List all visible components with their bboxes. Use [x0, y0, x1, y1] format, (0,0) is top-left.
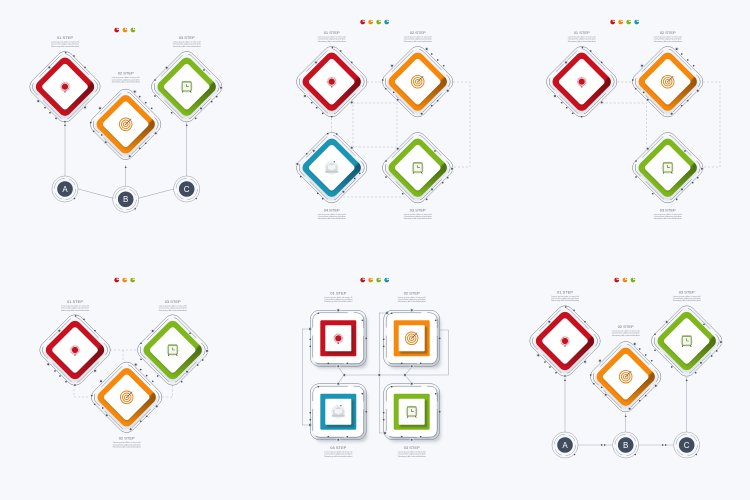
- label: step 1: Lorem ipsum dolor sit amet elit: [324, 296, 353, 299]
- connector lines: [64, 122, 188, 198]
- label: step 3: Lorem ipsum dolor sit amet elit: [404, 213, 432, 216]
- label: step 4: Consectetur adipiscing sed diam: [324, 453, 352, 456]
- label: step 3: Lorem ipsum dolor sit amet elit: [173, 41, 201, 44]
- label: step 1: Consectetur adipiscing sed diam: [568, 38, 596, 41]
- label: step 3: 03 STEP: [165, 299, 181, 304]
- label: step 2: Consectetur adipiscing sed diam: [112, 78, 140, 81]
- node A: [52, 176, 78, 202]
- label: step 1: Nonummy nibh euismod tincidunt: [318, 40, 346, 43]
- label: step 2: Consectetur adipiscing sed diam: [654, 38, 682, 41]
- step 2 diamond: [629, 43, 707, 121]
- label: step 2: Nonummy nibh euismod tincidunt: [404, 40, 432, 43]
- step 1 diamond: [543, 43, 621, 121]
- node A: A: [62, 185, 68, 194]
- label: step 4: 04 STEP: [324, 207, 340, 212]
- label: step 4: Nonummy nibh euismod tincidunt: [318, 217, 346, 220]
- label: step 3: [673, 289, 701, 302]
- step 4 square: [309, 382, 367, 442]
- label: step 4: Consectetur adipiscing sed diam: [318, 215, 346, 218]
- label: step 4: [318, 207, 346, 220]
- label: step 3: Consectetur adipiscing sed diam: [654, 215, 682, 218]
- label: step 1: [324, 290, 353, 303]
- label: step 1: [568, 30, 596, 43]
- label: step 3: Consectetur adipiscing sed diam: [673, 297, 701, 300]
- label: step 2: Nonummy nibh euismod tincidunt: [654, 40, 682, 43]
- label: step 3: Nonummy nibh euismod tincidunt: [673, 299, 701, 302]
- label: step 1: Nonummy nibh euismod tincidunt: [324, 300, 353, 303]
- node B: B: [623, 441, 628, 450]
- label: step 2: Consectetur adipiscing sed diam: [398, 298, 426, 301]
- label: step 2: Lorem ipsum dolor sit amet elit: [654, 36, 682, 39]
- label: step 1: 01 STEP: [67, 299, 83, 304]
- label: step 1: [51, 35, 79, 48]
- label: step 3: Nonummy nibh euismod tincidunt: [654, 217, 682, 220]
- label: step 2: [612, 324, 640, 337]
- label: step 2: Lorem ipsum dolor sit amet elit: [612, 330, 640, 333]
- node C: C: [684, 441, 690, 450]
- label: step 1: Nonummy nibh euismod tincidunt: [551, 299, 579, 302]
- step 2 diamond: [379, 43, 457, 121]
- label: step 4: 04 STEP: [330, 445, 347, 450]
- label: step 2: 02 STEP: [660, 30, 676, 35]
- label: step 1: 01 STEP: [324, 30, 340, 35]
- label: step 3: [404, 207, 432, 220]
- panel: three steps with A B C nodes, top left: [26, 26, 226, 212]
- step 3 diamond: [134, 311, 212, 389]
- label: step 1: Nonummy nibh euismod tincidunt: [568, 40, 596, 43]
- label: step 1: Consectetur adipiscing sed diam: [551, 297, 579, 300]
- label: step 4: Nonummy nibh euismod tincidunt: [324, 455, 353, 458]
- label: step 3: Consectetur adipiscing sed diam: [404, 215, 432, 218]
- label: step 2: Lorem ipsum dolor sit amet elit: [112, 76, 140, 79]
- node B: [613, 432, 639, 458]
- label: step 1: 01 STEP: [57, 35, 73, 40]
- label: step 3: [398, 445, 426, 458]
- label: step 1: Consectetur adipiscing sed diam: [51, 43, 79, 46]
- label: step 2: Consectetur adipiscing sed diam: [612, 332, 640, 335]
- label: step 1: Lorem ipsum dolor sit amet elit: [51, 41, 79, 44]
- node C: [174, 176, 200, 202]
- step 1 square: [309, 308, 367, 368]
- label: step 2: Lorem ipsum dolor sit amet elit: [404, 36, 432, 39]
- label: step 2: [654, 30, 682, 43]
- label: step 3: Nonummy nibh euismod tincidunt: [159, 309, 187, 312]
- connector lines: [302, 311, 448, 435]
- dashed connectors: [74, 350, 173, 397]
- label: step 3: Consectetur adipiscing sed diam: [159, 307, 187, 310]
- legend: colour dots: [359, 276, 390, 284]
- label: step 3: Consectetur adipiscing sed diam: [398, 453, 426, 456]
- step 1 diamond: [36, 311, 114, 389]
- label: step 1: 01 STEP: [574, 30, 590, 35]
- label: step 3: Consectetur adipiscing sed diam: [173, 43, 201, 46]
- step 1 diamond: [293, 43, 371, 121]
- step 2 square: [383, 308, 441, 368]
- label: step 2: [404, 30, 432, 43]
- label: step 1: 01 STEP: [330, 290, 347, 295]
- label: step 2: [398, 290, 426, 303]
- label: step 2: Consectetur adipiscing sed diam: [113, 443, 141, 446]
- label: step 3: Lorem ipsum dolor sit amet elit: [654, 213, 682, 216]
- label: step 3: Nonummy nibh euismod tincidunt: [398, 455, 426, 458]
- step 1 diamond: [526, 302, 604, 380]
- node C: C: [184, 185, 190, 194]
- label: step 3: 03 STEP: [660, 207, 676, 212]
- legend: colour dots: [113, 26, 137, 34]
- label: step 1: Consectetur adipiscing sed diam: [324, 298, 352, 301]
- label: step 4: [324, 445, 353, 458]
- panel: four square steps, bottom centre: [302, 276, 448, 458]
- label: step 1: Nonummy nibh euismod tincidunt: [61, 309, 89, 312]
- label: step 3: 03 STEP: [179, 35, 195, 40]
- label: step 3: 03 STEP: [404, 445, 420, 450]
- label: step 1: [551, 289, 579, 302]
- panel: three steps with A B C arrows, bottom right: [526, 276, 726, 458]
- step 2 diamond: [88, 358, 166, 436]
- step 2 diamond: [87, 85, 165, 163]
- node A: [552, 432, 578, 458]
- dashed connectors: [602, 82, 720, 167]
- label: step 2: 02 STEP: [410, 30, 426, 35]
- label: step 3: Lorem ipsum dolor sit amet elit: [159, 305, 187, 308]
- step 3 square: [383, 382, 441, 442]
- label: step 2: Nonummy nibh euismod tincidunt: [398, 300, 426, 303]
- step 2 diamond: [587, 338, 665, 416]
- panel: three steps dashed, top right: [543, 18, 720, 220]
- label: step 3: Lorem ipsum dolor sit amet elit: [673, 295, 701, 298]
- label: step 1: Lorem ipsum dolor sit amet elit: [568, 36, 596, 39]
- node B: B: [123, 195, 128, 204]
- label: step 1: Consectetur adipiscing sed diam: [318, 38, 346, 41]
- label: step 2: Nonummy nibh euismod tincidunt: [612, 334, 640, 337]
- label: step 1: [61, 299, 89, 312]
- dashed connectors: [332, 82, 470, 197]
- label: step 3: 03 STEP: [410, 207, 426, 212]
- label: step 3: [173, 35, 201, 48]
- label: step 1: Lorem ipsum dolor sit amet elit: [318, 36, 346, 39]
- label: step 2: Consectetur adipiscing sed diam: [404, 38, 432, 41]
- panel: four steps dashed, top centre: [293, 18, 470, 220]
- step 3 diamond: [148, 48, 226, 126]
- step 3 diamond: [379, 129, 457, 207]
- label: step 3: 03 STEP: [679, 289, 695, 294]
- label: step 1: Consectetur adipiscing sed diam: [61, 307, 89, 310]
- node C: [674, 432, 700, 458]
- label: step 3: [654, 207, 682, 220]
- label: step 2: Nonummy nibh euismod tincidunt: [113, 445, 141, 448]
- label: step 1: 01 STEP: [557, 289, 573, 294]
- node B: [113, 186, 139, 212]
- label: step 2: 02 STEP: [119, 436, 135, 441]
- step 3 diamond: [629, 129, 707, 207]
- step 4 diamond: [293, 129, 371, 207]
- label: step 2: 02 STEP: [118, 71, 134, 76]
- label: step 3: Lorem ipsum dolor sit amet elit: [398, 451, 426, 454]
- label: step 2: Lorem ipsum dolor sit amet elit: [398, 296, 426, 299]
- legend: colour dots: [359, 18, 390, 26]
- legend: colour dots: [609, 18, 640, 26]
- connector arrows: [564, 377, 688, 446]
- label: step 1: Lorem ipsum dolor sit amet elit: [61, 305, 89, 308]
- panel: three steps V layout, bottom left: [36, 276, 212, 448]
- label: step 1: [318, 30, 346, 43]
- legend: colour dots: [613, 276, 637, 284]
- label: step 2: Lorem ipsum dolor sit amet elit: [113, 441, 141, 444]
- legend: colour dots: [113, 276, 136, 284]
- label: step 2: [112, 71, 140, 83]
- label: step 2: 02 STEP: [404, 290, 420, 295]
- label: step 3: Nonummy nibh euismod tincidunt: [173, 45, 201, 48]
- label: step 3: [159, 299, 187, 312]
- node A: A: [562, 441, 568, 450]
- label: step 2: 02 STEP: [618, 324, 634, 329]
- label: step 1: Nonummy nibh euismod tincidunt: [51, 45, 79, 48]
- step 1 diamond: [26, 48, 104, 126]
- label: step 4: Lorem ipsum dolor sit amet elit: [318, 213, 346, 216]
- label: step 1: Lorem ipsum dolor sit amet elit: [551, 295, 579, 298]
- label: step 3: Nonummy nibh euismod tincidunt: [404, 217, 432, 220]
- label: step 4: Lorem ipsum dolor sit amet elit: [324, 451, 353, 454]
- step 3 diamond: [648, 302, 726, 380]
- label: step 2: [113, 436, 141, 448]
- label: step 2: Nonummy nibh euismod tincidunt: [112, 80, 140, 83]
